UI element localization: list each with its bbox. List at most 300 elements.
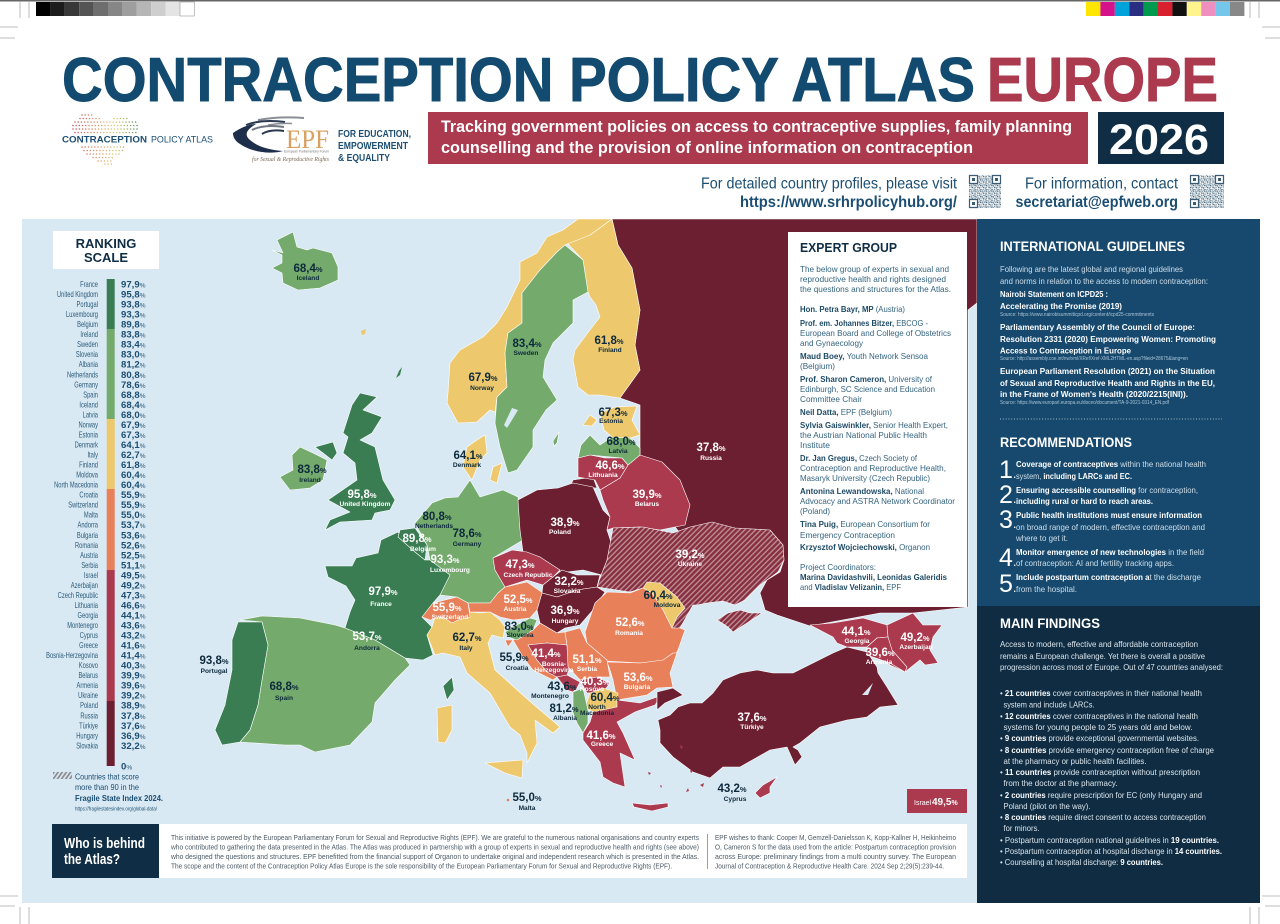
label: Portugal: Portugal	[201, 668, 228, 675]
chart: ranking country names: Belarus	[78, 672, 98, 680]
callout: Israel: 49,5%	[932, 797, 958, 808]
label: Germany: Germany	[453, 541, 482, 548]
label: Belarus	[632, 489, 662, 508]
chart: ranking values: 43,2%	[121, 630, 146, 642]
text block: findings bullets: for minors.	[1004, 823, 1040, 833]
text block: findings bullets: • 2 countries require prescription for EC (only Hungary and	[1000, 790, 1202, 800]
heading: international guidelines: INTERNATIONAL GUIDELINES	[1000, 239, 1185, 254]
label: Belarus: Belarus	[635, 501, 659, 508]
chart: ranking values: 36,9%	[121, 731, 146, 742]
label: Bulgaria	[623, 672, 653, 691]
text block: guidelines list: Nairobi Statement on ICPD25 :	[1000, 289, 1108, 299]
text block: expert list: Institute	[800, 440, 830, 450]
text block: expert list: Edinburgh, SC Science and Education	[800, 384, 935, 394]
country: Russia	[612, 219, 977, 626]
text block: guidelines list: in the Frame of Women's Health (2020/2215(INI)).	[1000, 389, 1188, 399]
text block: findings intro: progression across most of Europe. Out of 47 countries analysed:	[1000, 662, 1223, 672]
text block: guidelines list: European Parliament Resolution (2021) on the Situation	[1000, 366, 1215, 376]
label: Kosovo: 40,3%	[580, 676, 610, 688]
chart: ranking country names: Hungary	[76, 733, 98, 741]
country: Slovakia	[542, 570, 600, 597]
text block: numbered recommendations	[999, 456, 1206, 598]
label: Cyprus	[717, 783, 747, 803]
text block: thanks: EPF wishes to thank: Cooper M, Gemzell-Danielsson K, Kopp-Kallner H, Heikinheimo	[715, 833, 956, 842]
chart: ranking values: 68,8%	[121, 390, 146, 401]
label: Montenegro	[531, 681, 577, 700]
label: Latvia	[606, 436, 636, 455]
country: Croatia	[505, 623, 567, 680]
country: Bosnia-Herzegovina	[528, 643, 570, 677]
chart: ranking values: 60,4%	[121, 470, 146, 481]
country: Estonian islands	[583, 415, 597, 426]
text block: numbered recommendations: 5.	[999, 570, 1017, 598]
chart: ranking values: 68,0%	[121, 410, 146, 421]
legend: fragile state index: more than 90 in the	[75, 782, 139, 792]
label: Czech Republic	[503, 559, 553, 579]
country: France	[325, 532, 450, 660]
chart: ranking values: 93,3%	[121, 310, 146, 321]
chart: ranking country names: Germany	[74, 382, 98, 390]
text block: numbered recommendations: from the hospital.	[1016, 584, 1077, 594]
chart: ranking values: 39,9%	[121, 671, 146, 682]
text block: expert list: Advocacy and ASTRA Network Coordinator	[800, 496, 955, 506]
label: Bosnia-Herzegovina: Bosnia-	[542, 661, 566, 668]
chart: ranking values	[121, 280, 146, 772]
chart: ranking values: 83,0%	[121, 350, 146, 361]
text block: guidelines list: Source: https://www.europarl.europa.eu/doceo/document/TA-9-2021-0314_EN.pdf	[1000, 400, 1170, 406]
label: Russia	[696, 442, 726, 462]
text block: findings bullets: • 8 countries provide emergency contraception free of charge	[1000, 745, 1214, 755]
chart: ranking values: 43,6%	[121, 620, 146, 632]
label: Slovakia	[554, 576, 584, 595]
label: Bosnia-Herzegovina: Herzegovina	[534, 667, 574, 674]
label: Ireland	[297, 464, 327, 484]
map: small lakes and islands	[361, 329, 873, 801]
chart: ranking country names: Slovakia	[76, 743, 98, 751]
logo: EPF: & EQUALITY	[338, 153, 390, 164]
label: Andorra: 53,7%	[352, 631, 382, 643]
label: Slovenia	[504, 621, 534, 639]
label: Norway	[468, 372, 498, 392]
text block: expert list: Antonina Lewandowska, National	[800, 486, 924, 496]
text block: expert list: The below group of experts in sexual and	[800, 264, 949, 274]
label: Hungary	[550, 605, 580, 625]
chart: ranking country names: Israel	[84, 572, 98, 580]
label: Malta	[512, 792, 542, 812]
chart: ranking values: 67,9%	[121, 420, 146, 431]
label: France	[368, 586, 398, 608]
text block: numbered recommendations: 1.	[999, 456, 1017, 484]
label: Iceland: 68,4%	[293, 263, 323, 275]
chart: ranking values: 38,9%	[121, 701, 146, 712]
label: Ireland: 83,8%	[297, 464, 327, 476]
text block: guidelines list: Following are the latest global and regional guidelines	[1000, 264, 1183, 274]
country: Germany and Netherlands	[415, 480, 523, 603]
country: Serbia	[565, 628, 610, 680]
text block: guidelines list: Access to Contraception in Europe	[1000, 346, 1131, 356]
country: Sweden	[495, 245, 588, 473]
label: Turkiye: Türkiye	[740, 724, 764, 731]
chart: ranking values: 95,8%	[121, 290, 146, 300]
country: Turkey Europe	[657, 688, 683, 710]
chart: ranking country names: Ukraine	[78, 692, 98, 700]
country: Belgium	[398, 528, 427, 560]
text block: numbered recommendations: Include postpartum contraception at the discharge	[1016, 572, 1201, 582]
text block: numbered recommendations: where to get it.	[1015, 533, 1068, 543]
label: Luxembourg	[430, 554, 470, 574]
label: Luxembourg: 93,3%	[430, 554, 460, 566]
label: France: 97,9%	[368, 586, 398, 598]
label: Romania: 52,6%	[615, 617, 645, 629]
label: Montenegro: 43,6%	[547, 681, 577, 693]
label: Armenia	[865, 647, 895, 666]
label: Ukraine: Ukraine	[678, 561, 702, 568]
label: Denmark: Denmark	[453, 462, 481, 469]
label: Latvia: Latvia	[608, 448, 628, 455]
chart: ranking values: 83,8%	[121, 330, 146, 341]
label: Cyprus: Cyprus	[724, 796, 747, 803]
text block: findings bullets: system and include LARCs.	[1004, 700, 1094, 710]
text block: guidelines list: Resolution 2331 (2020) Empowering Women: Promoting	[1000, 334, 1216, 344]
text block: expert list: the Austrian National Public Health	[800, 430, 927, 440]
contact: email: secretariat@epfweb.org	[1016, 194, 1178, 211]
label: Slovakia: Slovakia	[554, 588, 581, 595]
label: Netherlands: Netherlands	[415, 523, 453, 530]
panel: international guidelines and recommendations	[977, 219, 1260, 606]
chart: ranking values: 51,1%	[121, 560, 146, 571]
label: Lithuania	[588, 460, 625, 479]
chart: ranking country names: Slovenia	[76, 351, 98, 359]
label: Croatia: Croatia	[506, 665, 529, 672]
text block: expert list: Prof. em. Johannes Bitzer, EBCOG -	[800, 318, 928, 328]
map labels: values and country names	[199, 263, 933, 812]
legend: fragile state index: https://fragilestatesindex.org/global-data/	[75, 806, 158, 812]
country: Norway	[447, 219, 612, 423]
label: Finland: 61,8%	[594, 335, 624, 347]
country: Iceland	[272, 232, 338, 290]
label: Ireland: Ireland	[299, 477, 321, 484]
text block: acknowledgement: The scope and the content of the Contraception Policy Atlas Europe is the sole responsibility of the European Parliamentary Forum for Sexual and Reproductive Rights (EPF).	[171, 862, 672, 870]
label: Norway: 67,9%	[468, 372, 498, 384]
label: Ukraine: 39,2%	[675, 549, 705, 561]
label: Russia: Russia	[700, 455, 722, 462]
label: France: France	[370, 601, 392, 608]
label: Austria: Austria	[504, 606, 527, 613]
text block: expert list: reproductive health and rights designed	[800, 274, 946, 284]
text block: findings intro: remains a European challenge. Yet there is overall a positive	[1000, 651, 1205, 661]
country: Ukraine	[597, 522, 784, 630]
label: Belgium: 89,8%	[402, 533, 432, 545]
chart: ranking country names: Ireland	[80, 331, 98, 339]
chart: ranking country names: Bosnia-Herzegovina	[46, 652, 98, 660]
logo: Contraception Policy Atlas	[62, 115, 213, 164]
label: Russia: 37,8%	[696, 442, 726, 454]
contact: email: For information, contact	[1025, 176, 1178, 192]
country: Bulgaria	[607, 653, 677, 700]
label: Turkiye: 37,6%	[737, 712, 767, 724]
country: Azerbaijan	[877, 613, 942, 672]
chart: ranking country names: Croatia	[79, 492, 98, 500]
chart: ranking values: 41,6%	[121, 641, 146, 652]
chart: ranking values: 40,3%	[121, 661, 146, 672]
text block: thanks: O, Cameron S for the data used from the article: Postpartum contraception provision	[715, 842, 956, 852]
label: Andorra: Andorra	[354, 645, 380, 652]
chart: ranking values: 55,0%	[121, 510, 146, 521]
label: Finland	[594, 335, 624, 354]
text block: numbered recommendations: 4.	[999, 544, 1017, 572]
chart: ranking country names: Poland	[80, 702, 98, 710]
chart: ranking country names: United Kingdom	[57, 291, 98, 299]
chart: ranking values: 55,9%	[121, 500, 146, 511]
label: Croatia: 55,9%	[499, 652, 529, 664]
logo: Contraception Policy Atlas: POLICY ATLAS	[151, 134, 213, 146]
legend: fragile state index: Fragile State Index 2024.	[75, 793, 163, 803]
chart: ranking values: 89,8%	[121, 320, 146, 331]
country: Belarus	[600, 455, 690, 530]
chart: ranking country names: Norway	[78, 422, 98, 430]
country: Sardinia	[437, 705, 452, 743]
chart: ranking country names: Moldova	[76, 472, 98, 480]
chart: ranking values: 93,8%	[121, 300, 146, 311]
country: Czech Republic	[493, 550, 560, 587]
label: Czech Republic: Czech Republic	[503, 572, 553, 579]
label: Spain: Spain	[275, 695, 293, 702]
chart: ranking country names: Cyprus	[80, 632, 98, 640]
text block: findings intro	[1000, 639, 1223, 672]
chart: ranking country names: Azerbaijan	[71, 582, 98, 590]
country: Latvia	[578, 435, 640, 465]
chart: ranking country names: Montenegro	[67, 622, 98, 630]
country: Corsica	[443, 677, 454, 700]
chart: ranking values: 80,8%	[121, 370, 146, 381]
chart: ranking country names: Russia	[80, 713, 98, 721]
country: Northern Ireland	[315, 442, 337, 460]
label: Latvia: 68,0%	[606, 436, 636, 448]
label: Albania: 81,2%	[549, 703, 579, 715]
label: Czech Republic: 47,3%	[505, 559, 535, 571]
chart: ranking country names: Greece	[79, 642, 98, 650]
callout: Israel	[907, 789, 967, 813]
label: Sweden	[512, 338, 542, 357]
logo: Contraception Policy Atlas: CONTRACEPTION	[62, 134, 147, 146]
text block: findings bullets: • Postpartum contraception national guidelines in 19 countries.	[1000, 835, 1219, 845]
text block: guidelines list: Parliamentary Assembly of the Council of Europe:	[1000, 322, 1195, 332]
logo: EPF: for Sexual & Reproductive Rights	[252, 156, 330, 163]
chart: ranking country names: Netherlands	[67, 372, 98, 380]
label: Austria: 52,5%	[503, 594, 533, 606]
label: Moldova	[643, 590, 681, 609]
label: Denmark	[453, 450, 483, 469]
chart: ranking values: 49,2%	[121, 580, 146, 591]
text block: expert list: Project Coordinators:	[800, 562, 876, 572]
panel: ranking scale heading	[53, 231, 159, 269]
label: Austria	[503, 594, 533, 613]
text block: findings bullets: from the doctor at the pharmacy.	[1004, 778, 1118, 788]
text block: guidelines list: of Sexual and Reproductive Health and Rights in the EU,	[1000, 378, 1215, 388]
text block: expert list: Sylvia Gaiswinkler, Senior Health Expert,	[800, 420, 948, 430]
country: Gotland	[553, 432, 559, 446]
country: Romania	[585, 588, 685, 663]
chart: ranking country names: Lithuania	[75, 602, 98, 610]
chart: ranking values: 78,6%	[121, 380, 146, 391]
chart: ranking country names: Belgium	[77, 321, 98, 329]
label: Malta: Malta	[519, 805, 536, 812]
label: Georgia: Georgia	[845, 638, 870, 645]
chart: ranking values: 62,7%	[121, 450, 146, 461]
chart: ranking country names: Albania	[79, 361, 98, 369]
country: Albania	[573, 688, 588, 733]
chart: ranking country names: Spain	[83, 392, 98, 400]
icon: QR code profiles	[969, 175, 1001, 208]
heading: recommendations: RECOMMENDATIONS	[1000, 435, 1132, 450]
text block: numbered recommendations: Ensuring accessible counselling for contraception,	[1016, 485, 1198, 495]
country: Austria	[468, 582, 543, 620]
chart: ranking values: 53,7%	[121, 520, 146, 531]
title: EUROPE	[987, 46, 1218, 115]
label: Germany: 78,6%	[452, 528, 482, 540]
text block: findings bullets: at the pharmacy or public health facilities.	[1004, 756, 1146, 766]
label: Kosovo: Kosovo	[580, 686, 604, 693]
label: Belarus: 39,9%	[632, 489, 662, 501]
country: Armenia	[867, 637, 907, 672]
text block: expert list: Emergency Contraception	[800, 530, 895, 540]
chart: ranking values: 52,5%	[121, 550, 146, 561]
chart: ranking country names	[46, 281, 98, 751]
text block: findings bullets: • 12 countries cover contraceptives in the national health	[1000, 711, 1198, 721]
label: Iceland: Iceland	[297, 275, 319, 282]
country: Switzerland	[422, 597, 470, 623]
label: Germany	[452, 528, 482, 548]
label: Belgium: Belgium	[410, 546, 436, 553]
text block: findings bullets: • 11 countries provide contraception without prescription	[1000, 767, 1200, 777]
label: Italy	[452, 632, 482, 652]
heading: expert group: EXPERT GROUP	[800, 240, 897, 255]
country: Spain	[240, 616, 410, 752]
label: North Macedonia	[580, 692, 620, 717]
country: Portugal	[215, 622, 268, 745]
chart: ranking country names: Portugal	[77, 301, 98, 309]
label: Iceland	[293, 263, 323, 282]
text block: expert list: Committee Chair	[800, 394, 862, 404]
chart: ranking values: 67,3%	[121, 430, 146, 441]
country: Turkey	[658, 647, 898, 778]
label: Spain: 68,8%	[269, 681, 299, 693]
text block: findings bullets: • Postpartum contraception at hospital discharge in 14 countries.	[1000, 846, 1222, 856]
label: Romania: Romania	[615, 630, 643, 637]
country: North Macedonia	[585, 688, 618, 712]
label: Sweden: Sweden	[514, 350, 538, 357]
label: Luxembourg: Luxembourg	[430, 567, 470, 574]
heading: main findings: MAIN FINDINGS	[1000, 616, 1100, 631]
text block: numbered recommendations: 3.	[999, 506, 1017, 534]
label: Netherlands: 80,8%	[422, 511, 452, 523]
chart: ranking country names: Denmark	[75, 442, 98, 450]
banner: subtitle: Tracking government policies on access to contraceptive supplies, family planning	[441, 117, 1072, 136]
text block: expert list	[800, 264, 955, 592]
text block: expert list: Hon. Petra Bayr, MP (Austria)	[800, 304, 905, 314]
label: Poland	[549, 517, 580, 536]
chart: ranking values: 37,8%	[121, 711, 146, 722]
label: Malta: 55,0%	[512, 792, 542, 804]
chart: ranking values: 60,4%	[121, 480, 146, 491]
text block: expert list: Prof. Sharon Cameron, University of	[800, 374, 933, 384]
chart: ranking country names: Luxembourg	[66, 311, 98, 319]
chart: ranking values: 46,6%	[121, 600, 146, 612]
text block: expert list: (Poland)	[800, 506, 830, 516]
label: Sweden: 83,4%	[512, 338, 542, 350]
label: Moldova: 60,4%	[643, 590, 673, 602]
chart: ranking country names: Malta	[84, 512, 98, 520]
text block: numbered recommendations: system, including LARCs and EC.	[1016, 471, 1132, 481]
text block: thanks	[715, 833, 956, 870]
country: Italy	[427, 612, 560, 763]
icon: QR code contact	[1190, 175, 1224, 208]
label: Ukraine	[675, 549, 705, 568]
label: Netherlands	[415, 511, 453, 530]
map: European countries	[215, 219, 977, 811]
banner: subtitle	[428, 112, 1088, 164]
text block: findings bullets: • Counselling at hospital discharge: 9 countries.	[1000, 857, 1163, 867]
logo: EPF: EMPOWERMENT	[338, 141, 408, 152]
text block: findings bullets: Poland (pilot on the way).	[1004, 801, 1090, 811]
text block: guidelines list: and norms in relation to the access to modern contraception:	[1000, 276, 1208, 286]
country: United Kingdom	[325, 393, 395, 530]
label: Hungary: Hungary	[552, 618, 579, 625]
chart: ranking country names: Kosovo	[79, 662, 98, 670]
label: Kosovo	[580, 676, 610, 693]
country: Crete	[632, 803, 668, 811]
label: Croatia	[499, 652, 529, 672]
chart: ranking values: 49,5%	[121, 570, 146, 581]
label: Switzerland: Switzerland	[432, 614, 468, 621]
label: Bulgaria: 53,6%	[623, 672, 653, 684]
text block: numbered recommendations: Public health institutions must ensure information	[1016, 510, 1202, 520]
print colour bar	[1086, 2, 1244, 16]
label: Armenia: 39,6%	[865, 647, 895, 659]
label: Belgium	[402, 533, 436, 553]
text block: findings bullets: • 8 countries require direct consent to access contraception	[1000, 812, 1206, 822]
chart: ranking values: 39,6%	[121, 681, 146, 692]
chart: ranking values: 53,6%	[121, 530, 146, 541]
text block: expert list: European Board and College of Obstetrics	[800, 328, 951, 338]
chart: ranking values: 39,2%	[121, 691, 146, 702]
label: Romania	[615, 617, 645, 637]
text block: acknowledgement: who contributed to gathering the data presented in the Atlas. The Atlas was produced in partnership with a group of experts in sexual and reproductive health and rights (see above)	[170, 842, 699, 852]
label: Norway: Norway	[470, 385, 494, 392]
text block: numbered recommendations: Coverage of contraceptives within the national health	[1016, 459, 1206, 469]
chart: ranking colour scale bar	[107, 279, 115, 766]
chart: ranking country names: Iceland	[79, 402, 98, 410]
chart: ranking country names: Romania	[75, 542, 98, 550]
label: Denmark: 64,1%	[453, 450, 483, 462]
label: Slovenia: Slovenia	[506, 632, 534, 639]
label: Greece: Greece	[591, 741, 614, 748]
text block: acknowledgement	[170, 833, 699, 870]
label: Azerbaijan: 49,2%	[900, 632, 930, 644]
logo: EPF	[233, 117, 411, 164]
text block: findings bullets	[1000, 688, 1222, 867]
chart: ranking country names: Czech Republic	[58, 592, 98, 600]
heading: who is behind the atlas	[52, 824, 159, 878]
label: Switzerland: 55,9%	[432, 602, 462, 614]
label: Georgia: 44,1%	[841, 626, 871, 638]
country: Kaliningrad	[570, 477, 597, 488]
chart: ranking country names: Türkiye	[79, 723, 98, 731]
text block: guidelines list: Source: https://www.nairobisummiticpd.org/content/icpd25-commitments	[1000, 312, 1154, 318]
legend: fragile state index: Countries that score	[75, 772, 139, 782]
chart: ranking values: 44,1%	[121, 610, 146, 622]
label: Lithuania: Lithuania	[588, 472, 618, 479]
